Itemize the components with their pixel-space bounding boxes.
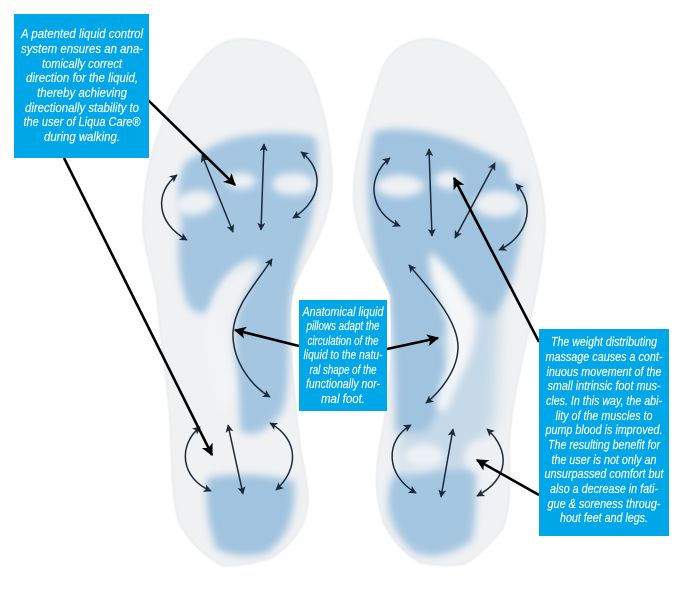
callout: weight distributing massage: lity of the muscles to xyxy=(556,409,653,423)
callout: weight distributing massage: small intrinsic foot mus- xyxy=(548,379,660,393)
callout: weight distributing massage: The resulting benefit for xyxy=(548,438,661,452)
callout: liquid control system: thereby achieving xyxy=(37,86,127,100)
callout: weight distributing massage xyxy=(539,329,669,536)
callout: anatomical liquid pillows: circulation of the xyxy=(308,334,379,348)
callout: weight distributing massage: hout feet and legs. xyxy=(560,511,648,525)
callout: weight distributing massage: cles. In this way, the abi- xyxy=(546,394,662,408)
panel: right insole xyxy=(354,39,545,565)
arrow: callout 3 to heel xyxy=(477,460,539,495)
callout: liquid control system: the user of Liqua Care® xyxy=(24,115,141,129)
insole outline: right xyxy=(354,39,545,565)
arrow: callout 3 to forefoot xyxy=(454,178,539,342)
callout: weight distributing massage: The weight distributing xyxy=(551,335,657,349)
arrow: callout 1 to heel xyxy=(64,158,212,455)
callout: liquid control system: direction for the liquid, xyxy=(26,71,138,85)
callout: liquid control system: A patented liquid control xyxy=(20,27,144,41)
callout: anatomical liquid pillows: Anatomical liquid xyxy=(302,305,384,319)
light pads: left xyxy=(172,173,314,412)
arrows: left foot circulation xyxy=(162,144,317,494)
liquid pool: right xyxy=(368,129,529,556)
callout: weight distributing massage: pump blood is improved. xyxy=(545,423,662,437)
callout: weight distributing massage: gue & soreness throug- xyxy=(548,497,660,511)
callout: anatomical liquid pillows: pillows adapt the xyxy=(306,319,380,333)
arrows: right foot circulation xyxy=(374,149,527,497)
callout: anatomical liquid pillows: mal foot. xyxy=(321,392,365,406)
pale wash: right xyxy=(395,300,500,470)
callout: liquid control system: during walking. xyxy=(44,130,120,144)
callout: liquid control system: directionally stability to xyxy=(25,101,139,115)
callout: anatomical liquid pillows xyxy=(299,300,387,411)
arrow: callout 2 to right arch xyxy=(387,338,438,349)
liquid pool: left xyxy=(172,133,318,555)
panel: left insole xyxy=(143,39,332,566)
callout: liquid control system: system ensures an ana- xyxy=(21,42,143,56)
callout: weight distributing massage: the user is not only an xyxy=(552,453,657,467)
arrow: callout 1 to forefoot xyxy=(148,100,235,185)
callout: anatomical liquid pillows: functionally nor- xyxy=(306,377,380,391)
callout: anatomical liquid pillows: liquid to the natu- xyxy=(304,348,382,362)
callout: weight distributing massage: inuous movement of the xyxy=(546,365,662,379)
insole outline: left xyxy=(143,39,332,566)
callout: weight distributing massage: also a decrease in fati- xyxy=(550,482,658,496)
light pads: right xyxy=(376,160,529,473)
callout: liquid control system xyxy=(14,14,149,158)
arrow: callout 2 to left arch xyxy=(235,330,299,346)
callout: anatomical liquid pillows: ral shape of the xyxy=(310,363,377,377)
callout: weight distributing massage: massage causes a cont- xyxy=(546,350,662,364)
callout: weight distributing massage: unsurpassed comfort but xyxy=(544,467,664,481)
callout: liquid control system: tomically correct xyxy=(42,57,122,71)
